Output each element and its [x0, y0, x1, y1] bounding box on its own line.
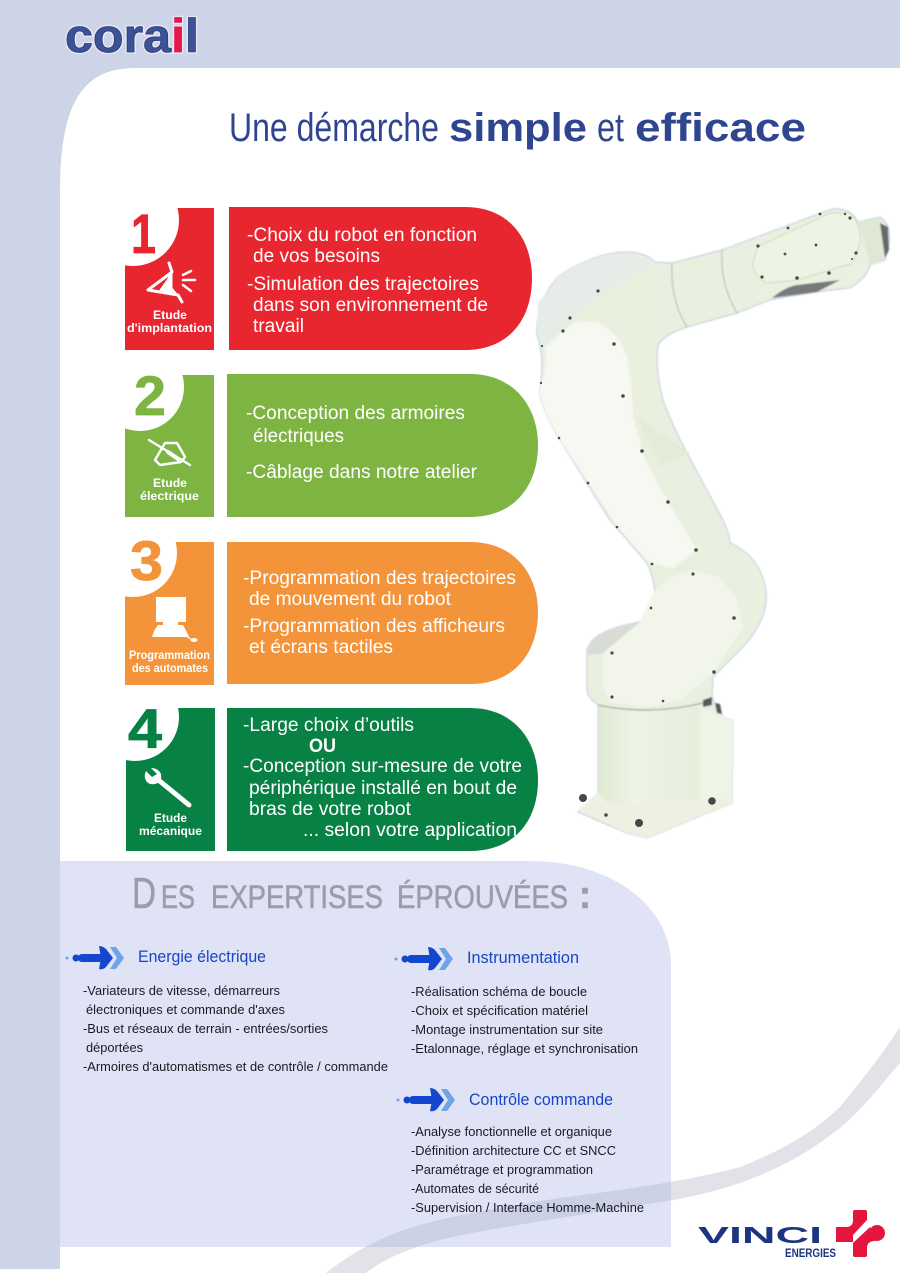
section: contrôle commande: -Définition architecture CC et SNCC	[411, 1144, 616, 1158]
section: instrumentation: -Etalonnage, réglage et synchronisation	[411, 1042, 638, 1056]
step 1 panel	[229, 207, 532, 350]
step 4 tab: Etude mécanique: 4	[128, 697, 162, 760]
step 3 tab: Programmation des automates	[125, 540, 214, 685]
step 2 tab: Etude électrique	[125, 375, 214, 517]
logo: VINCI Energies: VINCI	[698, 1222, 822, 1248]
title: efficace	[635, 106, 806, 150]
icon: wrench	[145, 768, 189, 805]
step 3 panel: -Programmation des afficheurs	[243, 616, 505, 637]
title: et	[597, 106, 624, 150]
logo: corail: corail	[65, 9, 199, 62]
step 2 panel: électriques	[253, 426, 344, 447]
panel: expertises	[60, 861, 671, 1247]
step 1 panel: de vos besoins	[253, 246, 380, 267]
section: contrôle commande: -Supervision / Interface Homme-Machine	[411, 1201, 644, 1215]
step 2 tab: Etude électrique: Etude	[153, 476, 187, 490]
step 4 tab: Etude mécanique: mécanique	[139, 824, 202, 838]
step 1 panel: -Choix du robot en fonction	[247, 225, 477, 246]
section: contrôle commande: -Analyse fonctionnelle et organique	[411, 1125, 612, 1139]
step 1 tab: Etude d'implantation: Etude	[153, 308, 187, 322]
step 2 panel: -Conception des armoires	[246, 403, 465, 424]
step 4 panel	[227, 708, 538, 851]
icon: blue arrow	[396, 1088, 455, 1111]
section: energie électrique: déportées	[86, 1041, 143, 1055]
section: energie électrique: -Variateurs de vitesse, démarreurs	[83, 984, 280, 998]
step 4 tab: Etude mécanique	[126, 708, 215, 851]
section: energie électrique	[66, 946, 388, 1074]
section: contrôle commande: -Automates de sécurité	[411, 1182, 539, 1196]
step 3 panel: et écrans tactiles	[249, 637, 393, 658]
step 4 panel: périphérique installé en bout de	[249, 778, 517, 799]
step 2 tab: Etude électrique: électrique	[140, 489, 199, 503]
step 2 tab: Etude électrique: 2	[134, 364, 166, 427]
icon: hand and pencil	[149, 440, 190, 465]
step 4 panel: -Large choix d’outils	[243, 715, 414, 736]
section: energie électrique: électroniques et commande d'axes	[86, 1003, 285, 1017]
step 3 tab: Programmation des automates: 3	[130, 529, 163, 592]
title: simple	[449, 106, 587, 150]
section: energie électrique: -Bus et réseaux de terrain - entrées/sorties	[83, 1022, 328, 1036]
section: instrumentation: -Montage instrumentation sur site	[411, 1023, 603, 1037]
logo: corail: corail	[65, 9, 199, 62]
icon: computer	[152, 597, 198, 642]
step 1 tab: Etude d'implantation: d'implantation	[127, 321, 212, 335]
section: instrumentation: -Réalisation schéma de boucle	[411, 985, 587, 999]
section: contrôle commande: Contrôle commande	[469, 1090, 613, 1109]
step 1 tab: Etude d'implantation: 1	[131, 202, 156, 265]
heading: des expertises éprouvées: :	[579, 873, 591, 917]
logo: VINCI Energies	[698, 1210, 885, 1260]
step 3 panel	[227, 542, 538, 684]
step 1 panel: dans son environnement de	[253, 295, 488, 316]
swoosh	[326, 1027, 900, 1273]
section: contrôle commande	[396, 1088, 644, 1215]
icon: eye and sight cone	[148, 263, 195, 302]
section: energie électrique: Energie électrique	[138, 947, 266, 966]
step 2 panel	[227, 374, 538, 517]
swoosh over panel	[366, 1182, 671, 1247]
title: Une démarche	[229, 106, 439, 150]
step 3 panel: -Programmation des trajectoires	[243, 568, 516, 589]
icon: blue arrow	[394, 947, 453, 970]
step 4 tab: Etude mécanique: Etude	[154, 811, 187, 825]
step 3 panel: de mouvement du robot	[249, 589, 452, 610]
section: instrumentation: -Choix et spécification matériel	[411, 1004, 588, 1018]
step 1 panel: -Simulation des trajectoires	[247, 274, 479, 295]
robot arm illustration	[537, 209, 890, 838]
section: instrumentation	[394, 947, 638, 1056]
robot screws	[540, 213, 858, 827]
icon: blue arrow	[66, 946, 124, 969]
section: energie électrique: -Armoires d'automatismes et de contrôle / commande	[83, 1060, 388, 1074]
heading: des expertises éprouvées: ES	[161, 879, 195, 915]
heading: des expertises éprouvées: EXPERTISES	[211, 879, 383, 915]
step 4 panel: -Conception sur-mesure de votre	[243, 756, 522, 777]
step 1 tab: Etude d'implantation	[125, 208, 214, 350]
step 3 tab: Programmation des automates: Programmation	[129, 648, 210, 662]
step 2 panel: -Câblage dans notre atelier	[246, 462, 478, 483]
section: contrôle commande: -Paramétrage et programmation	[411, 1163, 593, 1177]
heading: des expertises éprouvées: ÉPROUVÉES	[397, 879, 568, 915]
step 4 panel: OU	[309, 736, 336, 757]
step 4 panel: bras de votre robot	[249, 799, 412, 820]
title	[229, 106, 806, 150]
heading: des expertises éprouvées	[132, 869, 591, 918]
section: instrumentation: Instrumentation	[467, 948, 579, 967]
heading: des expertises éprouvées: D	[132, 869, 156, 918]
step 4 panel: ... selon votre application	[303, 820, 517, 841]
step 1 panel: travail	[253, 316, 304, 337]
step 3 tab: Programmation des automates: des automates	[132, 661, 208, 675]
logo: VINCI Energies: ENERGIES	[785, 1248, 836, 1260]
icon: red cross mark	[836, 1210, 885, 1257]
